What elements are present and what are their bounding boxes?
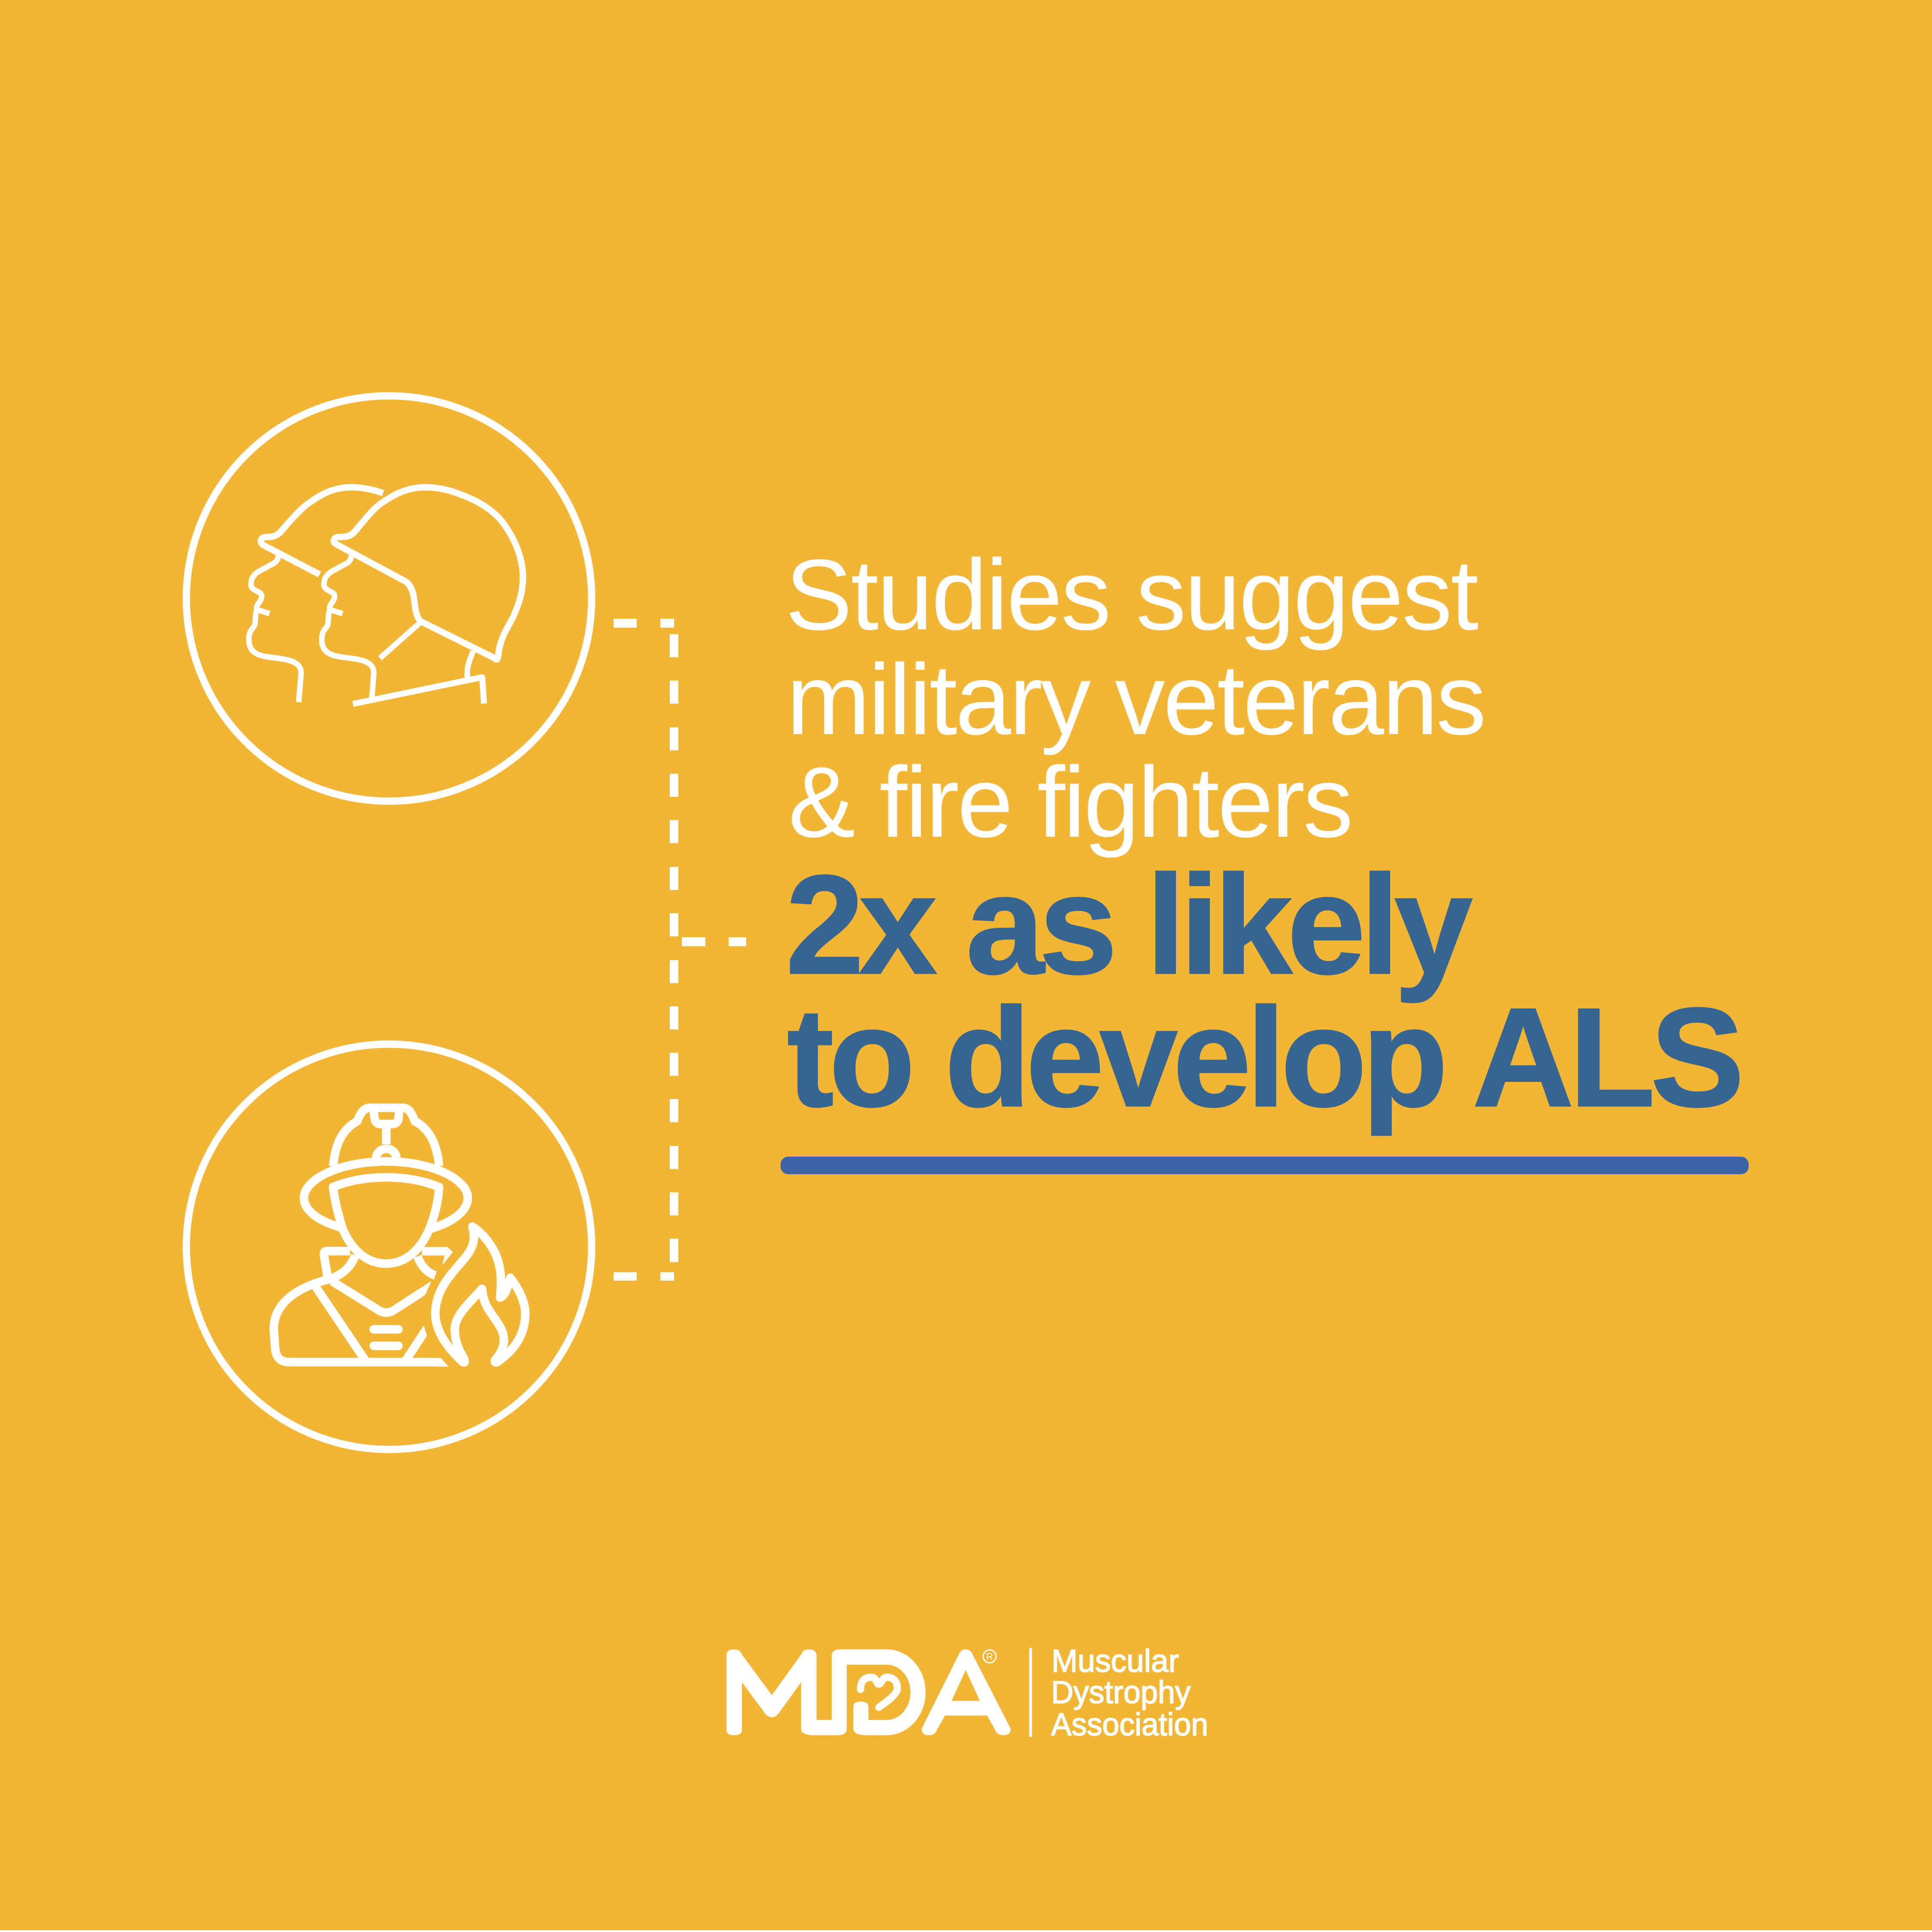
dashed connector bracket — [614, 619, 746, 1281]
icon: veterans in helmets inside circle — [186, 396, 592, 801]
headline: to develop ALS — [787, 978, 1744, 1137]
headline: 2x as likely — [786, 846, 1473, 1004]
logo wordmark: Dystrophy — [1051, 1674, 1191, 1710]
registered mark — [983, 1650, 996, 1663]
headline underline — [781, 1157, 1749, 1174]
face — [333, 1177, 439, 1264]
intro text: military veterans — [787, 643, 1486, 756]
logo wordmark: Muscular — [1051, 1643, 1179, 1679]
collar and shoulder — [324, 1251, 350, 1276]
helmet brim — [304, 1161, 468, 1228]
icon: firefighter with flame inside circle — [186, 1044, 592, 1449]
intro text: Studies suggest — [785, 538, 1479, 651]
headline — [786, 846, 1744, 1137]
registered mark: R — [986, 1651, 993, 1662]
logo wordmark: Association — [1051, 1707, 1208, 1742]
intro text: & fire fighters — [788, 746, 1353, 858]
helmet dome — [333, 1108, 439, 1166]
MDA logo — [726, 1643, 1208, 1742]
logo divider — [1029, 1648, 1032, 1737]
flame — [435, 1227, 525, 1362]
intro text — [785, 538, 1486, 858]
logo wordmark — [1051, 1643, 1208, 1742]
